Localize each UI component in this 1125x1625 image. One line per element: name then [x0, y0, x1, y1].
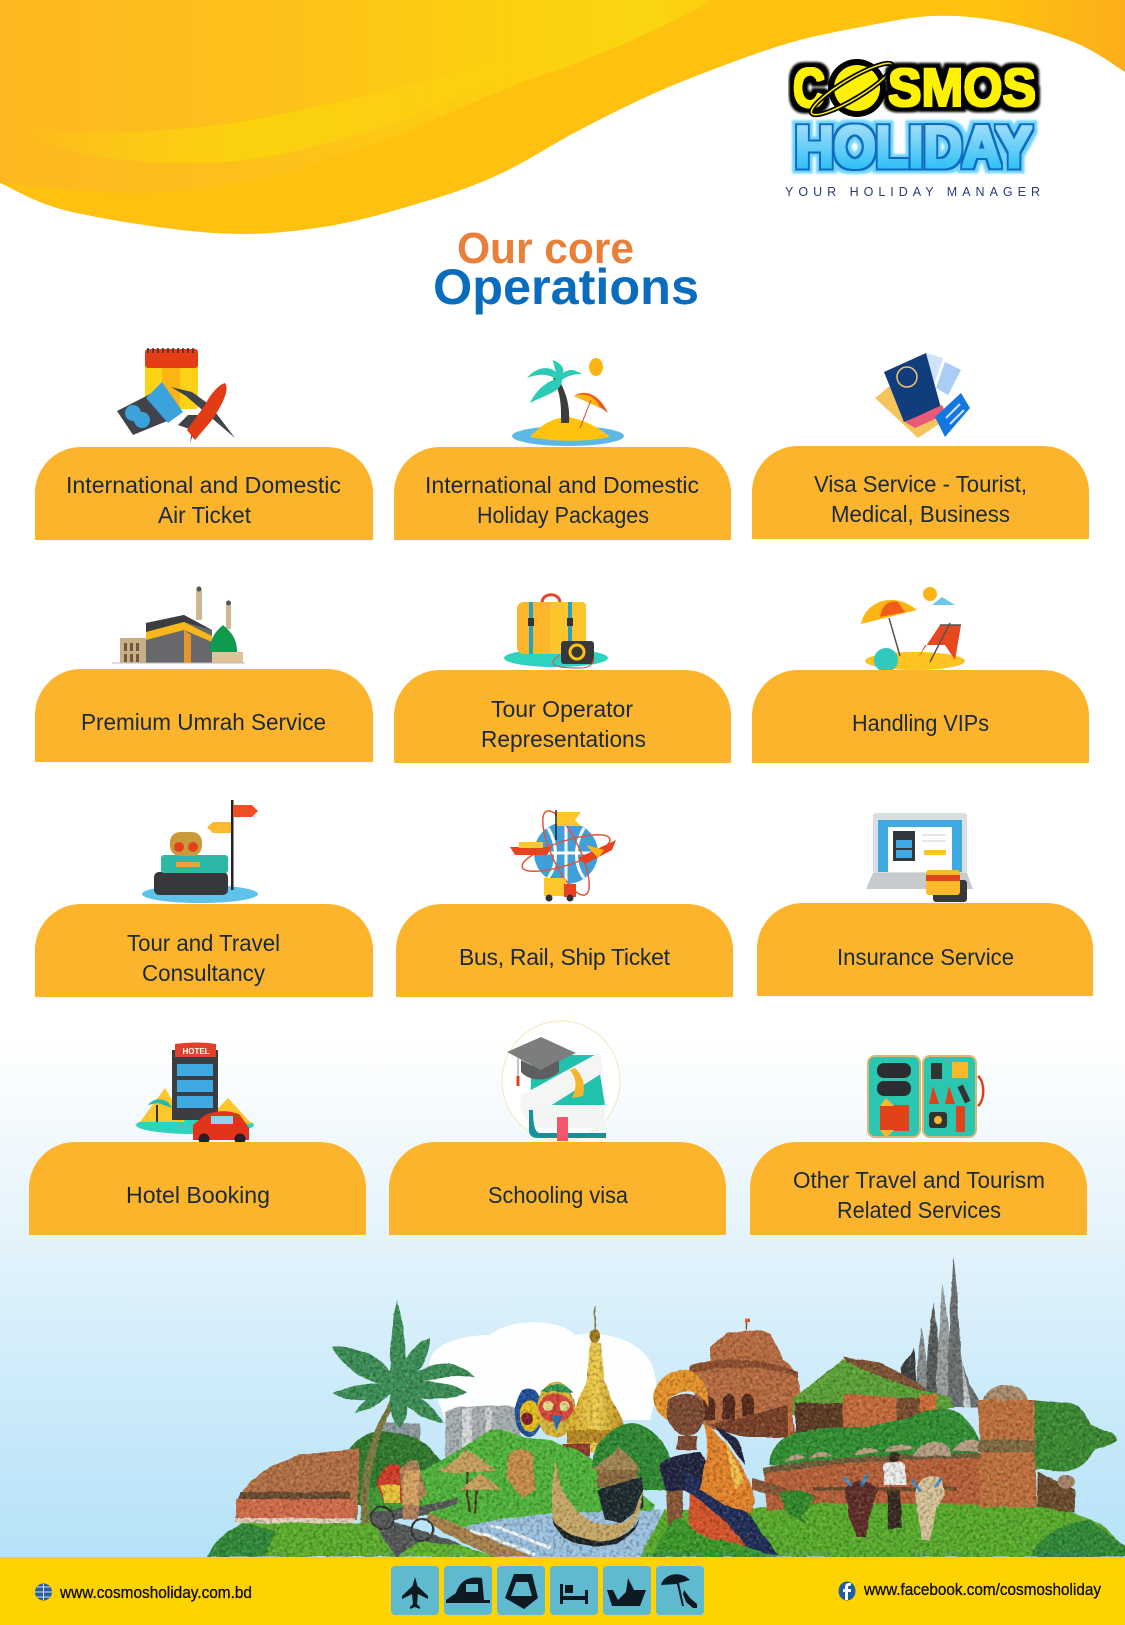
wall grass overlap [765, 1503, 1073, 1525]
icon: kaaba and mosque [112, 586, 245, 663]
title line 2: Operations [433, 259, 699, 315]
face [665, 1394, 705, 1436]
icon: beach umbrella [661, 1574, 697, 1608]
huts [437, 1448, 640, 1515]
icon: hotel with car [136, 1042, 254, 1144]
monument spires [900, 1257, 984, 1407]
card: tour operator [394, 670, 731, 763]
icon: luggage with signpost [142, 800, 258, 903]
icon: beach chair and umbrella [861, 587, 965, 672]
bushes behind palm [330, 1432, 445, 1505]
right arm [752, 1478, 817, 1502]
card: air ticket: Air Ticket [158, 502, 252, 528]
icon: ship [607, 1578, 646, 1606]
footer bar [0, 1557, 1125, 1625]
card: holiday packages: International and Domestic [425, 472, 699, 498]
icon: air ticket [117, 348, 235, 443]
left arm [666, 1484, 683, 1530]
website link: www.cosmosholiday.com.bd [59, 1583, 252, 1602]
card: air ticket [35, 447, 373, 540]
icon: globe with ship, plane and truck [510, 805, 616, 902]
blouse [660, 1452, 712, 1490]
palm tree [332, 1300, 475, 1523]
card: visa service [752, 446, 1089, 539]
rickshaw and puller [371, 1460, 433, 1541]
icon: travel organizer [868, 1056, 983, 1138]
dark shawl at shoulder [715, 1427, 745, 1465]
icon: graduation cap and books [502, 1021, 620, 1141]
facebook link: www.facebook.com/cosmosholiday [863, 1580, 1101, 1599]
landscape illustration of Bangladesh landmarks [207, 1257, 1125, 1557]
farmer and oxen [813, 1452, 957, 1540]
card: handling VIPs [752, 670, 1089, 763]
cloud [429, 1322, 656, 1420]
tree near pagoda [592, 1423, 672, 1490]
right tree [1032, 1400, 1117, 1472]
card: hotel booking [29, 1142, 366, 1235]
logo word: Cosmos [793, 56, 1036, 122]
kantaji temple [690, 1318, 800, 1437]
right ground [640, 1507, 1125, 1557]
boats [552, 1460, 643, 1546]
icon: tram [505, 1574, 538, 1609]
card: tour and travel: Tour and Travel [127, 930, 280, 956]
card: schooling visa: Schooling visa [488, 1182, 628, 1208]
green bank by palm [360, 1480, 425, 1520]
turban [653, 1370, 709, 1420]
road [367, 1497, 462, 1557]
tiger [507, 1449, 535, 1498]
bushes behind wall [770, 1408, 980, 1465]
card: premium umrah [35, 669, 373, 762]
card: tour operator: Representations [481, 726, 646, 752]
dress [688, 1490, 755, 1557]
card: insurance service [757, 903, 1093, 996]
woman picking tea [652, 1370, 817, 1557]
brick stupa left [235, 1448, 360, 1523]
wall with domes [763, 1440, 980, 1510]
parliament building [380, 1406, 520, 1460]
orange sash [700, 1423, 755, 1513]
green hill [413, 1429, 655, 1528]
green mound with ruins [790, 1357, 955, 1437]
card: holiday packages: Holiday Packages [477, 502, 649, 528]
card: visa service: Visa Service - Tourist, [814, 471, 1027, 497]
card: other services: Related Services [837, 1197, 1001, 1223]
icon: hotel with car: HOTEL [182, 1047, 210, 1056]
brick tower [978, 1385, 1075, 1513]
leaves in hand [780, 1490, 815, 1525]
card: other services [750, 1142, 1087, 1235]
card: air ticket: International and Domestic [66, 472, 341, 498]
card: bus rail ship: Bus, Rail, Ship Ticket [459, 944, 671, 970]
card: premium umrah: Premium Umrah Service [81, 709, 326, 735]
card: holiday packages [394, 447, 731, 540]
logo word: Holiday: HOLIDAY [795, 115, 1032, 180]
card: tour and travel [35, 904, 373, 997]
logo: Cosmos Holiday [785, 56, 1040, 199]
card: handling VIPs: Handling VIPs [852, 710, 989, 736]
icon: bed [560, 1584, 588, 1604]
title [433, 224, 699, 315]
logo word: Cosmos: C [793, 56, 825, 119]
logo tagline: YOUR HOLIDAY MANAGER [785, 185, 1040, 199]
icon: passport and visa [875, 353, 970, 438]
title line 1: Our core [457, 224, 634, 273]
card: hotel booking: Hotel Booking [126, 1182, 270, 1208]
masks [515, 1382, 575, 1438]
golden pagoda [563, 1307, 626, 1456]
card: other services: Other Travel and Tourism [793, 1167, 1045, 1193]
icon: suitcase and camera [504, 595, 608, 668]
logo word: Cosmos: SMOS [888, 58, 1036, 118]
card: insurance service: Insurance Service [837, 944, 1014, 970]
icon: laptop and cards [866, 813, 973, 902]
header yellow wave [0, 0, 1125, 234]
icon: plane [402, 1577, 428, 1609]
landmarks and scenery with photo texture [207, 1257, 1125, 1557]
tea leaves foreground [652, 1518, 782, 1557]
dirt bank [425, 1513, 533, 1557]
foreground grass strip [397, 1541, 497, 1557]
main grass ground [207, 1515, 398, 1557]
icon: palm island [512, 358, 624, 446]
water [463, 1510, 662, 1557]
card: tour operator: Tour Operator [491, 696, 633, 722]
blue sash [685, 1470, 778, 1555]
card: visa service: Medical, Business [831, 501, 1010, 527]
icon: train [446, 1578, 490, 1603]
transport icon strip [391, 1566, 704, 1615]
card: bus rail ship [396, 904, 733, 997]
card: tour and travel: Consultancy [142, 960, 265, 986]
card: schooling visa [389, 1142, 726, 1235]
